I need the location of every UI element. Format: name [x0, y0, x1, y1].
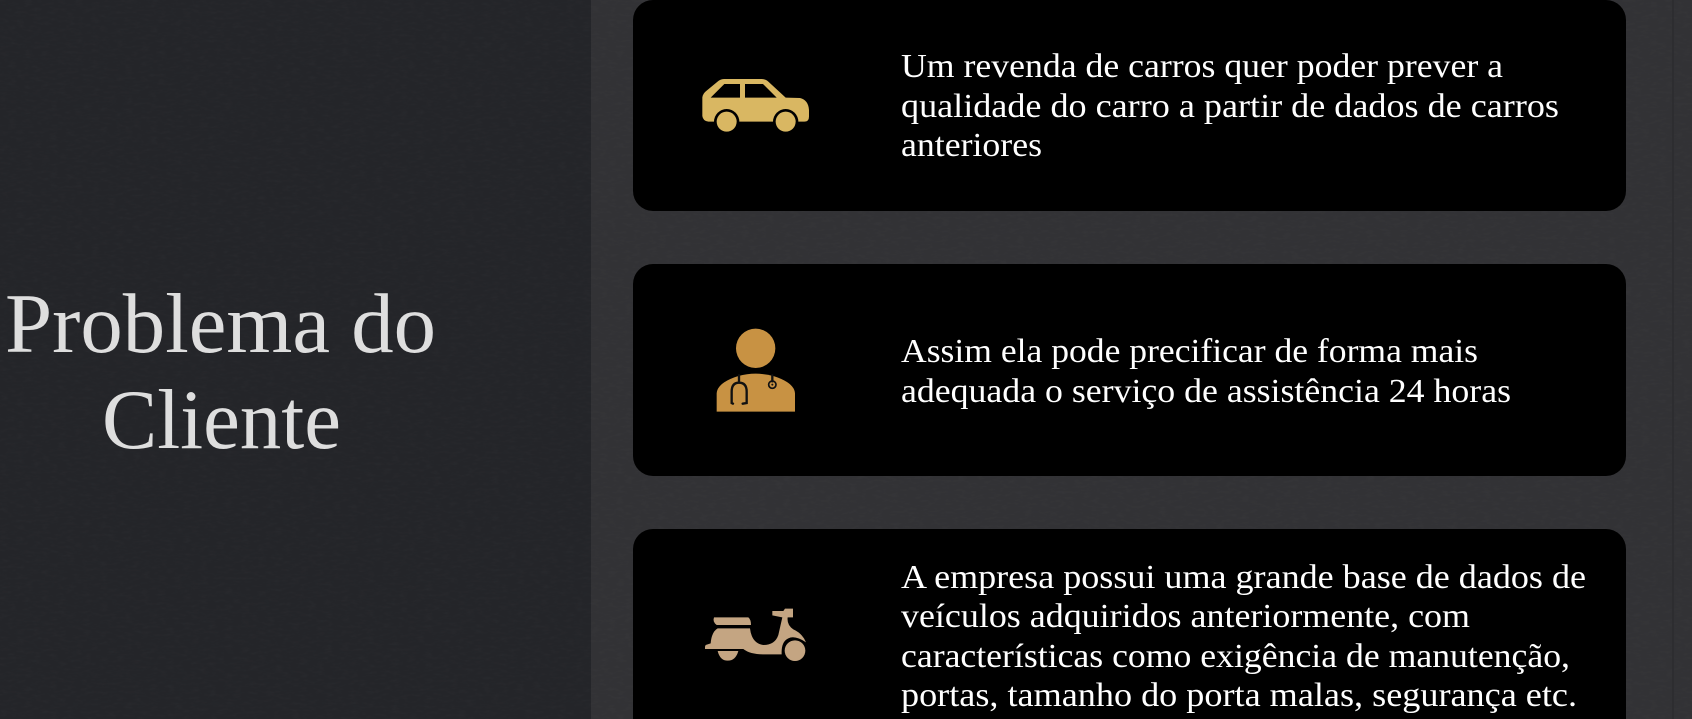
text: card 3: A empresa possui uma grande base de dados de: [901, 559, 1586, 596]
text: card 1: Um revenda de carros quer poder prever a: [901, 48, 1503, 85]
panel: vehicle database: [633, 529, 1626, 719]
text: card 2: adequada o serviço de assistência 24 horas: [901, 373, 1511, 410]
title: Cliente: [102, 373, 341, 467]
icon: scooter: [705, 609, 806, 661]
text: card 3: [901, 559, 1586, 714]
icon: doctor with stethoscope: [717, 329, 795, 412]
right background panel: [591, 0, 1692, 719]
text: card 1: anteriores: [901, 127, 1042, 164]
text: card 3: características como exigência de manutenção,: [901, 638, 1570, 675]
text: card 1: qualidade do carro a partir de dados de carros: [901, 88, 1559, 125]
text: card 2: [901, 333, 1511, 410]
title: [5, 277, 436, 467]
text: card 3: portas, tamanho do porta malas, segurança etc.: [901, 677, 1577, 714]
text: card 2: Assim ela pode precificar de forma mais: [901, 333, 1478, 370]
text: card 1: [901, 48, 1559, 164]
icon: car: [702, 79, 809, 134]
left background panel: [0, 0, 591, 719]
panel: pricing: [633, 264, 1626, 476]
text: card 3: veículos adquiridos anteriormente, com: [901, 598, 1470, 635]
panel: car dealer: [633, 0, 1626, 211]
title: Problema do: [5, 277, 436, 371]
